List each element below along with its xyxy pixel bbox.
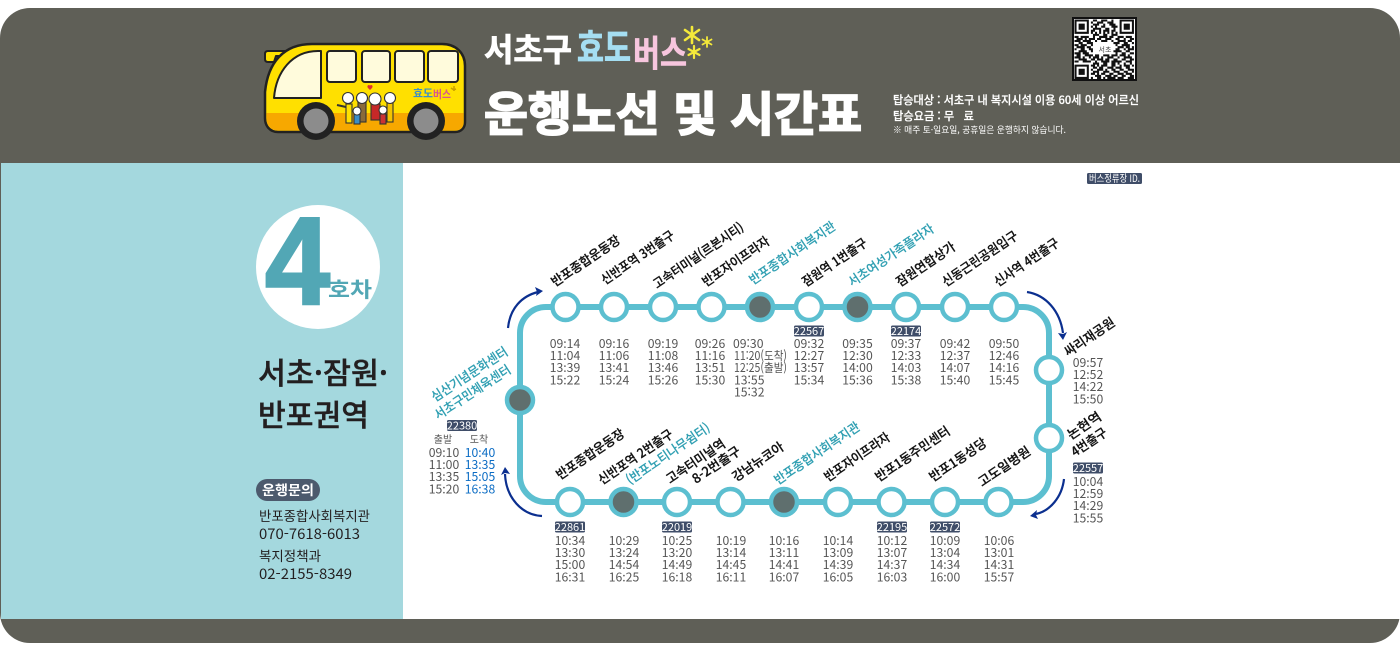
stop labels: top row: 잠원연합상가: [892, 237, 959, 290]
timetable: left terminal: 도착: [470, 431, 488, 446]
timetable: left terminal: 15:05: [465, 467, 495, 485]
timetable: bottom row: 10:12: [877, 531, 907, 549]
timetable: bottom row: 14:34: [930, 555, 960, 573]
timetable: top row: 09:37: [891, 334, 921, 352]
stops: top row: [552, 294, 1017, 320]
timetable: bottom row: 10:19: [716, 531, 746, 549]
title: service name: 버스: [633, 25, 687, 77]
pill: inquiry: 운행문의: [262, 479, 314, 499]
timetable: bottom row: 16:11: [716, 567, 746, 585]
badge: bus number 4: 호차: [328, 274, 372, 304]
timetable: bottom row: 10:29: [609, 531, 639, 549]
icon: seniors illustration: [337, 85, 396, 124]
timetable: bottom row: 14:31: [984, 555, 1014, 573]
badge: bus number 4: 4: [265, 193, 330, 331]
timetable: top row: 11:20(도착): [734, 346, 787, 364]
text block: rider info: 탑승대상 : 서초구 내 복지시설 이용 60세 이상 어르신: [893, 92, 1139, 108]
timetable: bottom row: 16:31: [555, 567, 585, 585]
timetable: left terminal: 13:35: [429, 467, 459, 485]
timetable: right side: 15:50: [1073, 389, 1103, 407]
timetable: bottom row: 16:05: [823, 567, 853, 585]
arrow: bottom right: [1030, 479, 1064, 519]
timetable: bottom row: [555, 531, 1014, 585]
timetable: top row: 15:24: [599, 370, 629, 388]
timetable: left terminal: 11:00: [429, 455, 459, 473]
timetable: bottom row: 15:57: [984, 567, 1014, 585]
icon: yellow bus: [265, 44, 465, 140]
timetable: top row: 11:04: [550, 346, 580, 364]
timetable: top row: 13:39: [550, 358, 580, 376]
timetable: top row: 12:30: [842, 346, 873, 364]
timetable: top row: 14:03: [891, 358, 921, 376]
stop id badges: 22019: [662, 519, 692, 535]
stop labels: top row: 반포종합사회복지관: [745, 216, 839, 288]
timetable: bottom row: 13:07: [877, 543, 907, 561]
timetable: left terminal: 15:20: [429, 479, 459, 497]
stop id badges: 22572: [930, 519, 960, 535]
stop labels: bottom row: 8-2번출구: [688, 441, 744, 487]
timetable: bottom row: 14:49: [662, 555, 692, 573]
timetable: top row: 13:41: [599, 358, 629, 376]
arrow: top right: [1027, 292, 1067, 340]
timetable: bottom row: 13:04: [930, 543, 960, 561]
stop labels: right side: 4번출구: [1067, 422, 1110, 460]
timetable: bottom row: 13:24: [609, 543, 639, 561]
timetable: top row: 11:16: [695, 346, 725, 364]
text block: contacts: 070-7618-6013: [259, 524, 360, 544]
timetable: top row: 13:55: [734, 370, 765, 388]
timetable: bottom row: 10:09: [930, 531, 960, 549]
bus logo: 효도: [413, 85, 433, 101]
timetable: top row: 12:33: [891, 346, 921, 364]
timetable: bottom row: 16:18: [662, 567, 692, 585]
timetable: right side: 12:59: [1073, 484, 1103, 502]
timetable: top row: 09:16: [599, 334, 629, 352]
stop: left side: [507, 387, 533, 413]
stop id badges: 22380: [447, 418, 477, 434]
stops: right side: [1036, 357, 1062, 451]
stop labels: left side: 심산기념문화센터: [427, 341, 511, 405]
timetable: top row: 15:32: [734, 382, 765, 400]
timetable: bottom row: 13:09: [823, 543, 853, 561]
timetable: bottom row: 10:06: [984, 531, 1014, 549]
timetable: top row: 13:51: [695, 358, 725, 376]
timetable: bottom row: 10:14: [823, 531, 853, 549]
stop id badges: 22174: [891, 323, 921, 339]
stop labels: bottom row: 반포1동주민센터: [871, 421, 953, 485]
timetable: bottom row: 14:39: [823, 555, 853, 573]
arrow: top left: [508, 287, 543, 328]
timetable: bottom row: 16:00: [930, 567, 960, 585]
stop labels: top row: 잠원역 1번출구: [798, 233, 870, 290]
timetable: left terminal: 13:35: [465, 455, 495, 473]
stop labels: bottom row: 반포자이프라자: [820, 427, 893, 485]
stop labels: bottom row: [552, 417, 1034, 490]
timetable: left terminal: [429, 431, 495, 497]
stop labels: top row: 반포자이프라자: [698, 231, 773, 290]
timetable: top row: 12:37: [940, 346, 970, 364]
timetable: bottom row: 13:30: [555, 543, 585, 561]
timetable: top row: 09:50: [989, 334, 1019, 352]
stop labels: bottom row: 강남뉴코아: [728, 437, 787, 485]
text block: contacts: 복지정책과: [259, 545, 321, 565]
title: service name: 효도: [577, 18, 631, 72]
timetable: top row: 15:30: [695, 370, 725, 388]
timetable: top row: 15:38: [891, 370, 921, 388]
panel: left info column: [1, 163, 403, 619]
timetable: bottom row: 16:03: [877, 567, 907, 585]
timetable: top row: 14:07: [940, 358, 970, 376]
timetable: top row: 11:08: [648, 346, 678, 364]
badge: bus number 4: [256, 193, 380, 331]
timetable: bottom row: 14:45: [716, 555, 746, 573]
stop labels: top row: 반포종합운동장: [547, 230, 624, 290]
panel: route map background: [403, 163, 1400, 619]
timetable: top row: [550, 334, 1019, 400]
qr code: [1072, 17, 1137, 81]
timetable: right side: 15:55: [1073, 508, 1103, 526]
timetable: top row: 09:14: [550, 334, 580, 352]
timetable: left terminal: 09:10: [429, 443, 459, 461]
timetable: top row: 12:25(출발): [734, 358, 787, 376]
timetable: top row: 09:32: [794, 334, 824, 352]
timetable: top row: 09:26: [695, 334, 725, 352]
stop labels: top row: 고속터미널(르본시티): [649, 217, 747, 292]
timetable: bottom row: 13:11: [769, 543, 799, 561]
timetable: right side: 10:04: [1073, 472, 1103, 490]
stop labels: bottom row: 반포1동성당: [925, 433, 990, 485]
text block: contacts: 반포종합사회복지관: [259, 505, 370, 525]
timetable: right side: 12:52: [1073, 365, 1103, 383]
direction arrows: [501, 287, 1067, 519]
timetable: bottom row: 14:54: [609, 555, 639, 573]
stop labels: top row: 신반포역 3번출구: [597, 225, 678, 288]
icon: stars: [685, 27, 712, 58]
timetable: bottom row: 13:20: [662, 543, 692, 561]
bus logo: 버스: [433, 86, 451, 102]
stop labels: top row: 신사역 4번출구: [990, 233, 1062, 290]
text block: rider info: ※ 매주 토·일요일, 공휴일은 운행하지 않습니다.: [893, 123, 1066, 136]
timetable: bottom row: 14:41: [769, 555, 799, 573]
timetable: top row: 12:46: [989, 346, 1019, 364]
timetable: right side: 14:22: [1073, 377, 1103, 395]
stop id badges: 22195: [877, 519, 907, 535]
stops: bottom row: [557, 489, 1012, 515]
stop labels: bottom row: 반포종합사회복지관: [770, 417, 863, 488]
timetable: left terminal: 출발: [434, 431, 452, 446]
timetable: top row: 09:42: [940, 334, 970, 352]
stop labels: top row: 서초여성가족플라자: [844, 219, 937, 290]
stop labels: right side: 싸리재공원: [1060, 312, 1118, 360]
timetable: top row: 15:36: [842, 370, 873, 388]
timetable: bottom row: 10:34: [555, 531, 585, 549]
text block: contacts: 02-2155-8349: [259, 564, 352, 584]
stop labels: bottom row: (반포노티나무쉼터): [622, 418, 713, 488]
timetable: top row: 15:45: [989, 370, 1019, 388]
route line: [520, 307, 1049, 502]
timetable: top row: 11:06: [599, 346, 629, 364]
timetable: top row: 14:16: [989, 358, 1019, 376]
timetable: top row: 15:40: [940, 370, 970, 388]
stop labels: right side: 논현역: [1063, 406, 1105, 443]
timetable: right side: 09:57: [1073, 353, 1103, 371]
bus logo: [413, 85, 456, 102]
stop id badges: 22567: [794, 323, 824, 339]
text block: contacts: [259, 505, 370, 584]
timetable: bottom row: 15:00: [555, 555, 585, 573]
stop labels: right side: [1060, 312, 1118, 460]
legend: bus stop id: 버스정류장 ID.: [1089, 170, 1140, 185]
heading: service area: 반포권역: [258, 391, 369, 435]
text block: rider info: 탑승요금 : 무 료: [893, 108, 974, 124]
heading: service area: [258, 349, 388, 435]
timetable: top row: 09:19: [648, 334, 678, 352]
timetable: bottom row: 13:01: [984, 543, 1014, 561]
timetable: top row: 15:34: [794, 370, 824, 388]
stop labels: bottom row: 신반포역 2번출구: [594, 424, 676, 488]
timetable: top row: 15:22: [550, 370, 580, 388]
stop labels: bottom row: 반포종합운동장: [552, 423, 628, 483]
timetable: right side: [1073, 353, 1103, 526]
timetable: bottom row: 10:16: [769, 531, 799, 549]
timetable: bottom row: 14:37: [877, 555, 907, 573]
timetable: left terminal: 10:40: [465, 443, 495, 461]
timetable: bottom row: 13:14: [716, 543, 746, 561]
arrow: bottom left: [501, 467, 542, 516]
timetable: top row: 13:57: [794, 358, 824, 376]
stop labels: left side: 서초구민체육센터: [430, 359, 514, 423]
timetable: top row: 12:27: [794, 346, 824, 364]
stop id badges: [447, 323, 1103, 535]
timetable: bottom row: 16:07: [769, 567, 799, 585]
title: route and timetable: 운행노선 및 시간표: [484, 76, 862, 145]
timetable: top row: 09:35: [842, 334, 873, 352]
timetable: top row: 15:26: [648, 370, 678, 388]
heading: service area: 서초·잠원·: [258, 349, 388, 393]
stop labels: bottom row: 고도일병원: [974, 441, 1034, 490]
stop labels: top row: 신동근린공원입구: [938, 225, 1021, 290]
stop labels: top row: [547, 216, 1062, 292]
timetable: left terminal: 16:38: [465, 479, 495, 497]
text block: rider info: [893, 92, 1139, 136]
timetable: top row: 09:30: [733, 334, 764, 352]
timetable: top row: 13:46: [648, 358, 678, 376]
timetable: top row: 14:00: [842, 358, 873, 376]
title: service name: [484, 18, 712, 77]
stop id badges: 22557: [1073, 460, 1103, 476]
timetable: bottom row: 16:25: [609, 567, 639, 585]
qr code: 서초: [1099, 45, 1112, 55]
stop id badges: 22861: [555, 519, 585, 535]
timetable: right side: 14:29: [1073, 496, 1103, 514]
stop labels: bottom row: 고속터미널역: [662, 434, 729, 487]
timetable: bottom row: 10:25: [662, 531, 692, 549]
title: service name: 서초구: [484, 25, 572, 71]
